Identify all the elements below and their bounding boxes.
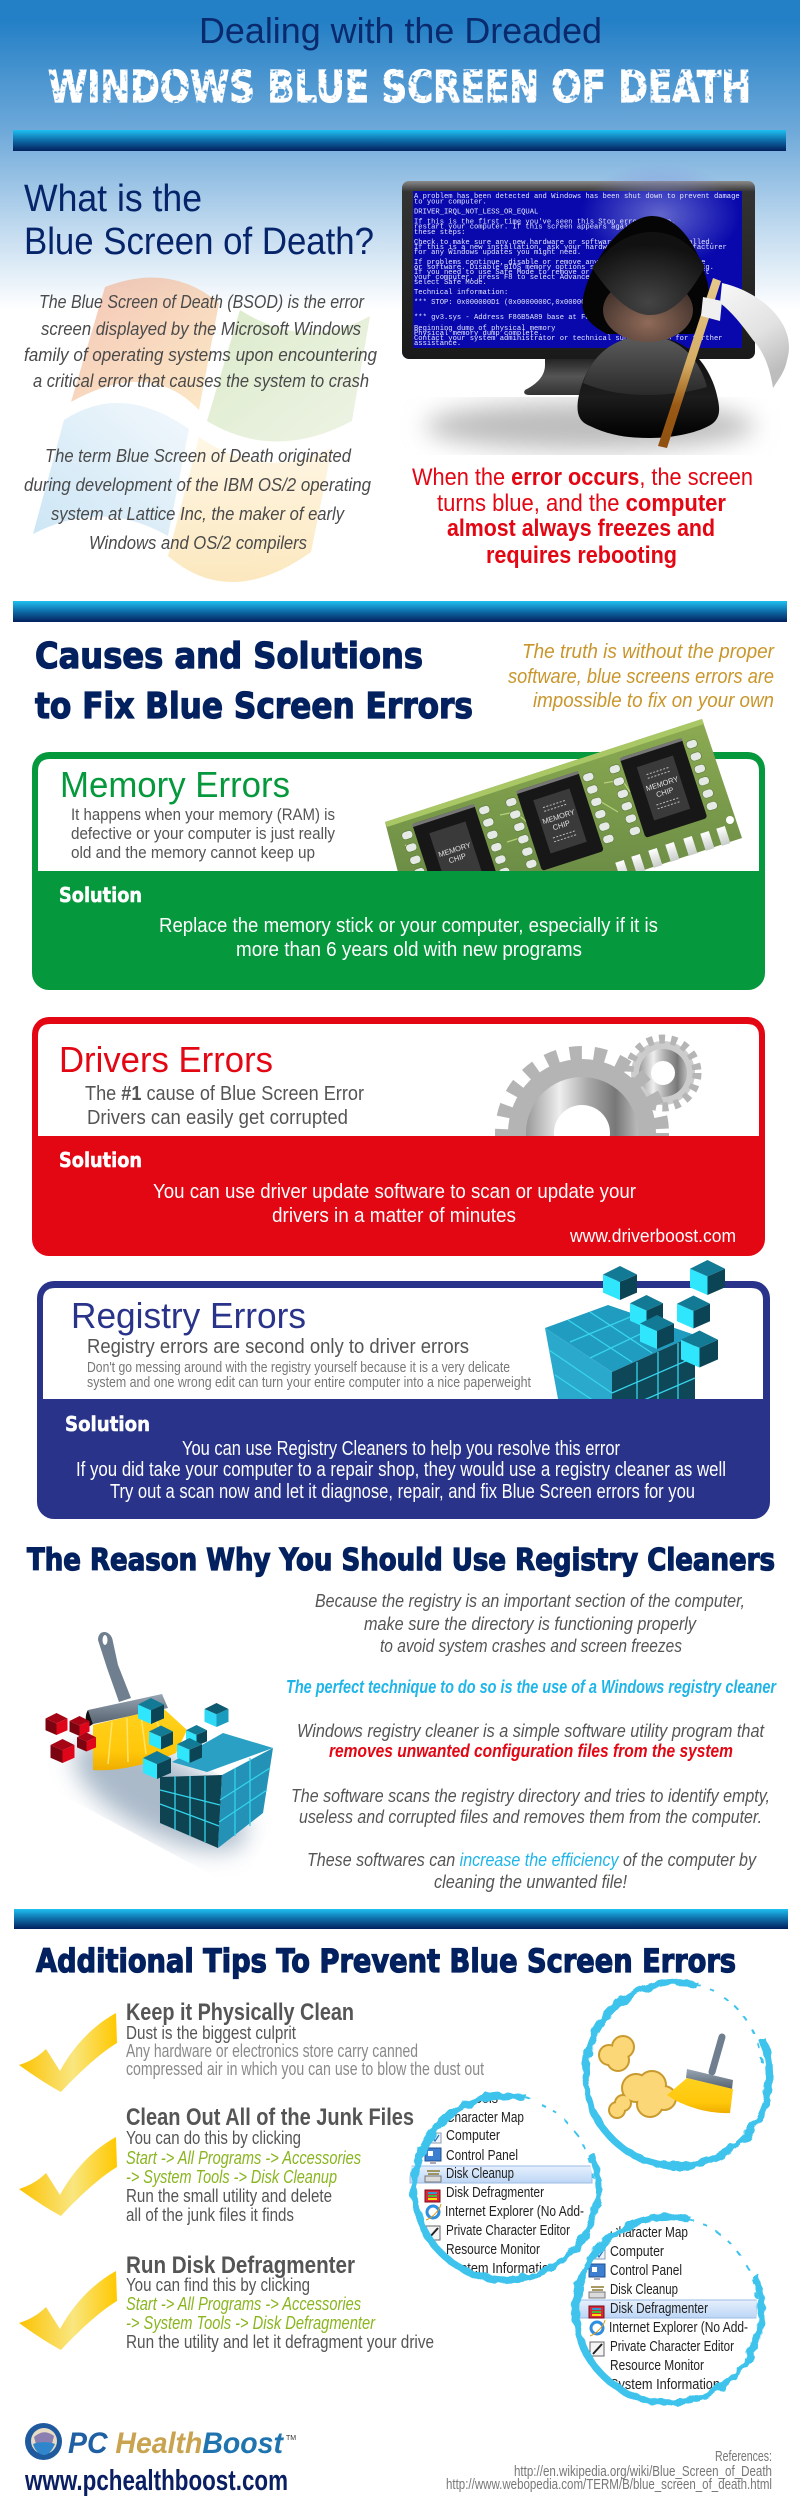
menu items: Character Map — [610, 2224, 688, 2241]
tip: clean out junk files: all of the junk files it finds — [126, 2205, 294, 2225]
monitor stand — [524, 358, 610, 395]
highlight — [410, 2166, 592, 2183]
menu items: Disk Defragmenter — [446, 2184, 544, 2201]
solution text: drivers in a matter of minutes — [272, 1205, 516, 1227]
paragraph: efficiency — [307, 1849, 758, 1892]
menu items: Character Map — [446, 2109, 524, 2126]
link: website: www.pchealthboost.com — [24, 2465, 288, 2497]
menu icons — [425, 2133, 441, 2240]
menu items: Computer — [610, 2243, 664, 2260]
chip 3 — [620, 738, 707, 838]
hood drape — [592, 232, 705, 315]
solution text: You can use driver update software to scan or update your — [153, 1181, 636, 1203]
tip: keep it physically clean: Any hardware or electronics store carry canned — [126, 2041, 418, 2061]
description — [85, 1083, 364, 1129]
callout: the truth — [508, 641, 775, 712]
big registry cube — [172, 1733, 273, 1772]
title line: Dealing with the Dreaded: Dealing with the Dreaded — [199, 10, 602, 51]
description: Don't go messing around with the registry yourself because it is a very delicate — [87, 1360, 510, 1376]
tip: clean out junk files: Clean Out All of the Junk Files — [126, 2104, 414, 2131]
heading: Causes and Solutions: to Fix Blue Screen Errors — [35, 686, 473, 727]
menu items: Private Character Editor — [446, 2222, 570, 2239]
paragraph: importance: Because the registry is an important section of the computer, — [315, 1590, 745, 1611]
chip 2 — [516, 771, 604, 871]
broom head — [88, 1694, 168, 1724]
screen text: A problem has been detected and Windows has been shut down to prevent damage — [414, 193, 740, 201]
panel: registry errors — [37, 1260, 770, 1519]
circle: broom and dust — [579, 1981, 770, 2166]
circle: disk defragmenter menu — [571, 2215, 762, 2403]
screen text: restart your computer. If this screen appears again, follow — [414, 224, 668, 232]
screen text: Technical information: — [414, 289, 508, 297]
description: system and one wrong edit can turn your entire computer into a nice paperweight — [87, 1375, 531, 1391]
floating cyan cubes — [138, 1698, 164, 1724]
ring — [414, 2096, 598, 2280]
chip 1: CHIP — [447, 851, 467, 865]
panel: memory errors — [32, 719, 765, 990]
icon: registry cubes — [545, 1260, 725, 1410]
illustration: broom sweeping registry cubes — [46, 1632, 273, 1873]
text block: term origin: during development of the IBM OS/2 operating — [24, 474, 372, 495]
tip: run disk defragmenter — [126, 2252, 434, 2352]
icon: gears — [495, 1034, 702, 1136]
text block: why registry cleaners — [286, 1590, 777, 1892]
tip: run disk defragmenter: Run the utility and let it defragment your drive — [126, 2332, 434, 2352]
screen text: If you need to use Safe Mode to remove or disable components, restart — [414, 269, 710, 277]
menu items: Control Panel — [610, 2262, 682, 2279]
heading: memory errors: Memory Errors — [60, 764, 290, 805]
paragraph: importance: to avoid system crashes and screen freezes — [380, 1635, 682, 1656]
menu items: System Information — [610, 2376, 720, 2393]
text block: BSOD definition: family of operating systems upon encountering — [24, 344, 378, 365]
logo: PC HealthBoost — [25, 2423, 296, 2460]
screen text: your computer, press F8 to select Advanced Startup Options, and then — [414, 274, 705, 282]
description — [71, 805, 335, 862]
tip: run disk defragmenter: -> System Tools -> Disk Defragmenter — [126, 2313, 376, 2333]
solution label: Solution — [59, 883, 142, 907]
header background — [0, 0, 800, 310]
callout: the truth: software, blue screens errors are — [508, 666, 774, 688]
panel: drivers errors — [32, 1017, 765, 1256]
logo globe — [25, 2423, 62, 2460]
menu items — [445, 2090, 584, 2277]
heading: Causes and Solutions: Causes and Solutions — [35, 636, 423, 677]
heading: Causes and Solutions — [35, 636, 473, 727]
text block: term origin: Windows and OS/2 compilers — [89, 532, 307, 553]
icon: checkmark 1 — [19, 2013, 117, 2092]
text block: BSOD definition: screen displayed by the Microsoft Windows — [41, 318, 361, 339]
solution text — [153, 1181, 636, 1227]
screen text: If this is a new installation, ask your hardware or software manufacturer — [414, 244, 727, 252]
text block: term origin: system at Lattice Inc, the maker of early — [51, 503, 346, 524]
callout: the truth: impossible to fix on your own — [533, 690, 774, 712]
text block: term origin — [24, 445, 372, 553]
solution text: You can use Registry Cleaners to help you resolve this error — [182, 1438, 620, 1460]
screen text: *** gv3.sys - Address F86B5A89 base at F86B5000, DateStamp 3dd991eb — [414, 314, 701, 322]
text block: BSOD definition: a critical error that causes the system to crash — [33, 370, 369, 391]
menu items: Internet Explorer (No Add- — [445, 2203, 584, 2220]
menu items: Disk Cleanup — [446, 2165, 514, 2182]
screen text: DRIVER_IRQL_NOT_LESS_OR_EQUAL — [414, 208, 538, 216]
paragraph: importance — [315, 1590, 745, 1656]
tip: keep it physically clean — [126, 1999, 484, 2079]
paragraph: windows registry cleaner — [297, 1720, 765, 1761]
trademark: TM — [286, 2435, 296, 2442]
description: defective or your computer is just really — [71, 824, 335, 843]
description: Drivers can easily get corrupted — [87, 1107, 348, 1129]
screen text: Contact your system administrator or technical support group for further — [414, 335, 723, 343]
menu items: Private Character Editor — [610, 2338, 734, 2355]
tip: run disk defragmenter: You can find this by clicking — [126, 2275, 310, 2295]
scythe wrap — [701, 297, 722, 321]
callout: when the error occurs: requires rebooting — [486, 542, 677, 569]
reaper body gloss — [583, 336, 707, 395]
chip 2: CHIP — [551, 818, 571, 832]
chip 3: MEMORY — [645, 774, 679, 793]
screen text: select Safe Mode. — [414, 279, 487, 287]
shadow — [58, 1717, 262, 1873]
divider bar 2 — [13, 601, 787, 622]
screen text: these steps: — [414, 229, 465, 237]
tip: keep it physically clean: compressed air in which you can use to blow the dust out — [126, 2059, 484, 2079]
solution label: Solution — [59, 1148, 142, 1172]
callout: when the error occurs: turns blue, and the computer — [437, 490, 726, 517]
menu items: Resource Monitor — [446, 2241, 540, 2258]
tip: clean out junk files: You can do this by clicking — [126, 2128, 301, 2148]
screen text: If problems continue, disable or remove any newly installed hardware — [414, 259, 705, 267]
broom bristles — [93, 1708, 187, 1770]
paragraph: software scans — [291, 1785, 770, 1827]
screen text: or software. Disable BIOS memory options such as caching or shadowing. — [414, 264, 714, 272]
references: References: — [715, 2448, 772, 2465]
reaper body — [578, 336, 719, 438]
chip 2: MEMORY — [541, 807, 576, 826]
heading: What is the Blue Screen of Death: Blue Screen of Death? — [24, 221, 374, 263]
screen text: assistance. — [414, 340, 461, 348]
solution label: Solution — [65, 1412, 150, 1436]
screen text: Physical memory dump complete. — [414, 330, 543, 338]
dust clouds — [600, 2037, 675, 2117]
icon: faded Windows logo — [33, 278, 370, 582]
divider bar 3 — [14, 1909, 788, 1929]
circle: disk cleanup menu — [409, 2090, 598, 2280]
screen text — [414, 193, 740, 348]
divider bar 1 — [13, 130, 786, 151]
heading: What is the Blue Screen of Death — [24, 178, 374, 263]
solution text: more than 6 years old with new programs — [236, 939, 582, 961]
paragraph: importance: make sure the directory is functioning properly — [364, 1613, 698, 1634]
broom handle — [98, 1632, 131, 1702]
menu items: Resource Monitor — [610, 2357, 704, 2374]
ring — [576, 2217, 762, 2403]
tip: run disk defragmenter: Run Disk Defragmenter — [126, 2252, 355, 2279]
scythe blade — [720, 283, 789, 388]
icon: RAM stick — [385, 719, 742, 871]
broom — [712, 2037, 722, 2072]
monitor frame — [402, 181, 755, 359]
scythe handle — [658, 278, 721, 448]
tip: clean out junk files: -> System Tools -> Disk Cleanup — [126, 2167, 337, 2187]
red cubes — [46, 1713, 68, 1735]
illustration: monitor with blue screen and grim reaper — [402, 163, 789, 450]
menu items — [609, 2224, 748, 2393]
text block: term origin: The term Blue Screen of Death originated — [45, 445, 352, 466]
link: driverboost: www.driverboost.com — [569, 1226, 736, 1246]
description: Registry errors are second only to driver errors — [87, 1336, 469, 1358]
screen text: *** STOP: 0x000000D1 (0x0000000C,0x00000002,0x00000000,0xF86B5A89) — [414, 299, 697, 307]
reaper face — [603, 278, 693, 342]
tip: run disk defragmenter: Start -> All Programs -> Accessories — [126, 2294, 361, 2314]
tip: clean out junk files: Run the small utility and delete — [126, 2186, 332, 2206]
menu icons — [589, 2249, 605, 2356]
tip: keep it physically clean: Keep it Physically Clean — [126, 1999, 354, 2026]
tip: clean out junk files — [126, 2104, 414, 2225]
chip 1: MEMORY — [437, 840, 472, 859]
title — [48, 10, 751, 113]
heading: drivers errors: Drivers Errors — [59, 1039, 273, 1080]
menu items: ools — [475, 2090, 498, 2107]
solution text — [76, 1438, 726, 1503]
paragraph: efficiency: cleaning the unwanted file! — [434, 1871, 627, 1892]
description: old and the memory cannot keep up — [71, 843, 315, 862]
tip: keep it physically clean: Dust is the biggest culprit — [126, 2023, 296, 2043]
screen text: Check to make sure any new hardware or software is properly installed. — [414, 239, 714, 247]
screen text: If this is the first time you've seen this Stop error screen, — [414, 218, 675, 226]
screen text: Beginning dump of physical memory — [414, 325, 556, 333]
references — [446, 2448, 772, 2493]
description — [87, 1336, 531, 1391]
menu items: Control Panel — [446, 2147, 518, 2164]
callout: the truth: The truth is without the proper — [522, 641, 775, 663]
description: It happens when your memory (RAM) is — [71, 805, 335, 824]
callout: when the error occurs: almost always freezes and — [447, 515, 715, 542]
menu items: Disk Cleanup — [610, 2281, 678, 2298]
solution text: Try out a scan now and let it diagnose, repair, and fix Blue Screen errors for you — [110, 1481, 695, 1503]
paragraph: efficiency: These softwares can increase the efficiency of the computer by — [307, 1849, 758, 1870]
shadow — [425, 402, 755, 450]
paragraph: windows registry cleaner: removes unwanted configuration files from the system — [329, 1740, 733, 1761]
blue screen — [413, 191, 742, 348]
highlight — [573, 2300, 757, 2318]
text block: BSOD definition — [24, 291, 378, 391]
heading: What is the Blue Screen of Death: What is the — [24, 178, 202, 220]
menu items: Computer — [446, 2127, 500, 2144]
menu items: Disk Defragmenter — [610, 2300, 708, 2317]
heading: registry errors: Registry Errors — [71, 1295, 306, 1336]
tip: clean out junk files: Start -> All Programs -> Accessories — [126, 2148, 361, 2168]
screen text: for any Windows updates you might need. — [414, 249, 581, 257]
solution text — [159, 915, 658, 961]
solution text: Replace the memory stick or your computer, especially if it is — [159, 915, 658, 937]
logo wordmark: PC HealthBoost — [68, 2427, 285, 2460]
menu items: System Information — [446, 2260, 556, 2277]
text block: BSOD definition: The Blue Screen of Death (BSOD) is the error — [39, 291, 365, 312]
callout: when the error occurs: When the error occurs, the screen — [412, 464, 753, 491]
screen text: to your computer. — [414, 198, 487, 206]
icon: checkmark 2 — [19, 2137, 117, 2216]
menu items: Internet Explorer (No Add- — [609, 2319, 748, 2336]
callout: when the error occurs — [412, 464, 753, 569]
chip 1 — [412, 804, 496, 871]
description: The #1 cause of Blue Screen Error — [85, 1083, 364, 1105]
chip 3: CHIP — [655, 785, 675, 799]
reaper hood — [582, 216, 709, 334]
icon: checkmark 3 — [19, 2271, 117, 2350]
